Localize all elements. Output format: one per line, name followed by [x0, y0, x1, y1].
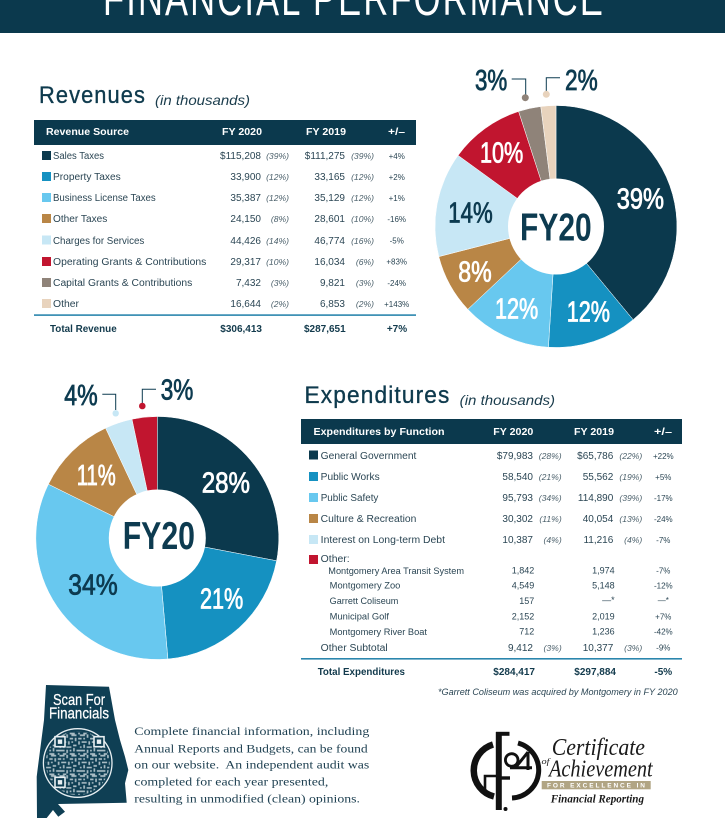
row: business license taxes: +1% — [389, 194, 405, 203]
row: interest on long-term debt: 11,216 — [583, 535, 614, 546]
row: other taxes: (10%) — [351, 214, 374, 224]
row: charges for services — [42, 236, 404, 247]
row: montgomery river boat: 712 — [519, 627, 534, 637]
row: other taxes: -16% — [387, 215, 406, 224]
row: total revenue: $306,413 — [220, 324, 262, 335]
row: property taxes: (12%) — [266, 172, 289, 182]
row: business license taxes: 35,129 — [314, 193, 345, 204]
row: montgomery river boat: -42% — [654, 628, 673, 637]
row: total revenue: +7% — [387, 324, 407, 335]
certificate of achievement text: FOR EXCELLENCE IN — [547, 783, 645, 790]
row: public works: 58,540 — [502, 472, 533, 483]
row: garrett coliseum: —* — [658, 596, 669, 605]
row: other heading — [309, 554, 350, 565]
row: property taxes: (12%) — [351, 172, 374, 182]
table header: Revenue Source — [46, 126, 129, 138]
row: total expenditures: Total Expenditures — [318, 667, 405, 678]
row: capital grants: Capital Grants & Contributions — [53, 278, 192, 289]
row: other subtotal: (3%) — [624, 643, 642, 653]
row: charges for services: (14%) — [266, 236, 289, 246]
table header: Expenditures by Function — [314, 426, 444, 438]
table header: FY 2020 — [222, 126, 262, 138]
table header — [34, 120, 416, 145]
row: charges for services: Charges for Services — [53, 236, 144, 247]
row: capital grants: -24% — [387, 279, 406, 288]
row: public safety: (39%) — [619, 493, 642, 503]
pie chart: revenues FY20: 12% — [495, 293, 538, 325]
heading: revenues: (in thousands) — [155, 92, 250, 108]
row: capital grants: (3%) — [356, 278, 374, 288]
row: operating grants: +83% — [386, 258, 407, 267]
row: sales taxes: (39%) — [351, 151, 374, 161]
row: montgomery zoo: 5,148 — [592, 580, 615, 590]
heading: expenditures: Expenditures — [304, 382, 450, 409]
text block: audit information: completed for each year presented, — [134, 775, 328, 789]
row: municipal golf — [330, 611, 671, 622]
row: other taxes: 28,601 — [314, 214, 345, 225]
text block: audit information: Annual Reports and Budgets, can be found — [134, 741, 368, 755]
row: total expenditures: $284,417 — [493, 667, 535, 678]
text block: audit information — [134, 724, 370, 806]
table: expenditures — [301, 419, 682, 697]
row: other: (2%) — [271, 299, 289, 309]
row: sales taxes: $111,275 — [305, 151, 345, 162]
row: total revenue: $287,651 — [304, 324, 346, 335]
pie chart: expenditures FY20: 21% — [200, 583, 243, 615]
table header: FY 2020 — [493, 426, 533, 438]
row: sales taxes: Sales Taxes — [53, 151, 104, 162]
text block: audit information: Complete financial information, including — [134, 724, 369, 738]
row: public safety: -17% — [654, 494, 673, 503]
row: montgomery area transit system: 1,842 — [512, 566, 534, 576]
row: property taxes — [42, 172, 405, 183]
row: other subtotal: (3%) — [544, 643, 562, 653]
row: other: (2%) — [356, 299, 374, 309]
row: interest on long-term debt: (4%) — [544, 535, 562, 545]
row: public works: 55,562 — [583, 472, 614, 483]
row: garrett coliseum: —* — [602, 595, 615, 605]
row: operating grants: (10%) — [266, 257, 289, 267]
row: sales taxes: +4% — [389, 152, 405, 161]
row: total revenue: Total Revenue — [50, 324, 117, 335]
table header: +/– — [654, 426, 672, 438]
row: public works: (21%) — [539, 472, 562, 482]
row: other subtotal: Other Subtotal — [321, 643, 388, 654]
certificate of achievement text: Certificate — [552, 735, 645, 761]
row: montgomery river boat — [330, 627, 673, 637]
row: interest on long-term debt: (4%) — [624, 535, 642, 545]
footnote: *Garrett Coliseum was acquired by Montgomery in FY 2020 — [438, 687, 678, 697]
row: culture and recreation: -24% — [654, 515, 673, 524]
row: interest on long-term debt: -7% — [656, 536, 670, 545]
row: garrett coliseum — [330, 595, 669, 606]
row: montgomery zoo: Montgomery Zoo — [330, 581, 400, 591]
row: interest on long-term debt — [309, 535, 670, 546]
row: operating grants: 16,034 — [314, 257, 345, 268]
slices — [36, 416, 279, 659]
row: other subtotal — [321, 643, 670, 654]
row: other: 6,853 — [320, 299, 345, 310]
row: property taxes: +2% — [389, 173, 405, 182]
row: public safety: (34%) — [539, 493, 562, 503]
row: montgomery zoo: 4,549 — [512, 580, 534, 590]
row: capital grants: (3%) — [271, 278, 289, 288]
row: general government: $65,786 — [577, 451, 614, 462]
row: other subtotal: 10,377 — [583, 643, 614, 654]
icon: Alabama map with QR code: Financials — [49, 705, 109, 722]
row: charges for services: 46,774 — [314, 236, 345, 247]
callout: 3% — [475, 65, 529, 101]
QR code — [43, 729, 112, 797]
table: revenues — [34, 120, 416, 335]
row: montgomery river boat: Montgomery River Boat — [330, 627, 428, 637]
row: operating grants — [42, 257, 407, 268]
row: total expenditures: $297,884 — [574, 667, 616, 678]
row: montgomery area transit system: -7% — [656, 567, 670, 576]
row: public safety: Public Safety — [321, 493, 378, 504]
table header — [301, 419, 682, 444]
heading: revenues: Revenues — [39, 82, 146, 109]
row: operating grants: 29,317 — [230, 257, 261, 268]
row: capital grants: 7,432 — [236, 278, 261, 289]
row: other taxes: Other Taxes — [53, 214, 107, 225]
row: other taxes — [42, 214, 406, 225]
row: other subtotal: 9,412 — [508, 643, 533, 654]
text block: audit information: on our website. An independent audit was — [134, 758, 370, 772]
row: general government: +22% — [653, 452, 674, 461]
row: operating grants: (6%) — [356, 257, 374, 267]
row: general government — [309, 450, 674, 462]
row: public safety: 114,890 — [578, 493, 614, 504]
row: public works — [309, 472, 671, 483]
icon: Alabama map with QR code — [37, 685, 128, 818]
row: property taxes: Property Taxes — [53, 172, 121, 183]
row: culture and recreation: 30,302 — [502, 514, 533, 525]
row: montgomery river boat: 1,236 — [592, 627, 615, 637]
row: other heading: Other: — [321, 554, 350, 565]
row: public safety — [309, 493, 673, 504]
callout: 4% — [64, 380, 119, 416]
pie chart: revenues FY20: 12% — [567, 297, 610, 329]
row: sales taxes: $115,208 — [220, 151, 261, 162]
row: other taxes: 24,150 — [230, 214, 261, 225]
row: public works: +5% — [655, 473, 671, 482]
row: general government: $79,983 — [497, 451, 533, 462]
callout: 4%: 4% — [64, 380, 98, 412]
title banner — [0, 0, 725, 33]
icon: Alabama map with QR code: Scan For — [53, 692, 106, 709]
row: other — [42, 299, 409, 310]
table header: FY 2019 — [574, 426, 614, 438]
certificate of achievement text — [542, 735, 654, 806]
row: montgomery area transit system — [328, 566, 670, 576]
table header: FY 2019 — [306, 126, 346, 138]
row: other: Other — [53, 299, 80, 310]
row: culture and recreation: 40,054 — [583, 514, 614, 525]
pie chart: revenues FY20: FY20 — [520, 207, 592, 250]
row: other: +143% — [384, 300, 409, 309]
callout: 3%: 3% — [475, 65, 507, 97]
text block: audit information: resulting in unmodified (clean) opinions. — [134, 792, 360, 806]
certificate of achievement text: of — [542, 757, 552, 766]
certificate of achievement text: Achievement — [547, 757, 654, 783]
callout: 2% — [543, 65, 598, 98]
row: culture and recreation: (11%) — [539, 514, 562, 524]
pie chart: expenditures FY20: 28% — [202, 468, 250, 500]
row: operating grants: Operating Grants & Contributions — [53, 257, 206, 268]
row: garrett coliseum: 157 — [519, 596, 534, 606]
row: public works: Public Works — [321, 472, 380, 483]
table header: +/– — [388, 126, 405, 138]
row: public works: (19%) — [619, 472, 642, 482]
heading: expenditures: (in thousands) — [460, 392, 555, 408]
row: general government: (22%) — [619, 451, 642, 461]
callout: 2%: 2% — [565, 65, 598, 97]
pie chart: expenditures FY20: 11% — [77, 460, 116, 492]
icon: GFOA logo — [474, 732, 539, 811]
row: business license taxes — [42, 193, 405, 204]
row: montgomery zoo: -12% — [654, 582, 673, 590]
pie chart: revenues FY20: 10% — [480, 137, 523, 169]
row: total expenditures: -5% — [654, 667, 672, 678]
row: municipal golf: +7% — [655, 612, 671, 621]
pie chart: revenues FY20 — [435, 65, 677, 348]
row: municipal golf: Municipal Golf — [330, 612, 390, 622]
callout: 3% — [139, 374, 193, 409]
row: culture and recreation: (13%) — [619, 514, 642, 524]
row: other subtotal: -9% — [656, 643, 670, 652]
row: garrett coliseum: Garrett Coliseum — [330, 596, 398, 606]
row: montgomery zoo — [330, 580, 673, 591]
row: culture and recreation: Culture & Recreation — [321, 514, 416, 525]
row: property taxes: 33,165 — [314, 172, 345, 183]
slices — [435, 106, 677, 348]
pie chart: revenues FY20: 39% — [617, 183, 664, 215]
row: business license taxes: (12%) — [266, 193, 289, 203]
row: other: 16,644 — [230, 299, 261, 310]
row: public safety: 95,793 — [502, 493, 533, 504]
row: interest on long-term debt: Interest on Long-term Debt — [321, 535, 445, 546]
pie chart: expenditures FY20 — [36, 374, 279, 659]
row: sales taxes: (39%) — [266, 151, 289, 161]
row: charges for services: -5% — [390, 236, 404, 246]
row: business license taxes: (12%) — [351, 193, 374, 203]
row: general government: General Government — [321, 451, 417, 462]
row: culture and recreation — [309, 514, 673, 525]
row: interest on long-term debt: 10,387 — [502, 535, 533, 546]
pie chart: revenues FY20: 14% — [448, 198, 493, 230]
row: municipal golf: 2,019 — [592, 611, 615, 621]
heading: expenditures — [304, 382, 555, 409]
certificate of achievement text: Financial Reporting — [550, 792, 644, 806]
pie chart: expenditures FY20: 34% — [68, 569, 118, 601]
row: montgomery area transit system: 1,974 — [592, 566, 615, 576]
row: property taxes: 33,900 — [230, 172, 261, 183]
row: general government: (28%) — [539, 451, 562, 461]
row: charges for services: 44,426 — [230, 236, 261, 247]
row: montgomery area transit system: Montgomery Area Transit System — [328, 566, 464, 576]
row: business license taxes: Business License Taxes — [53, 193, 156, 204]
row: charges for services: (16%) — [351, 236, 374, 246]
row: capital grants: 9,821 — [320, 278, 345, 289]
row: municipal golf: 2,152 — [512, 611, 534, 621]
row: total revenue — [50, 324, 407, 335]
pie chart: expenditures FY20: FY20 — [123, 515, 195, 558]
row: total expenditures — [318, 667, 672, 678]
heading: revenues — [39, 82, 250, 109]
callout: 3%: 3% — [161, 374, 193, 406]
row: other taxes: (8%) — [271, 214, 289, 224]
row: sales taxes — [42, 151, 405, 162]
pie chart: revenues FY20: 8% — [458, 257, 492, 289]
row: capital grants — [42, 278, 406, 289]
row: business license taxes: 35,387 — [230, 193, 261, 204]
